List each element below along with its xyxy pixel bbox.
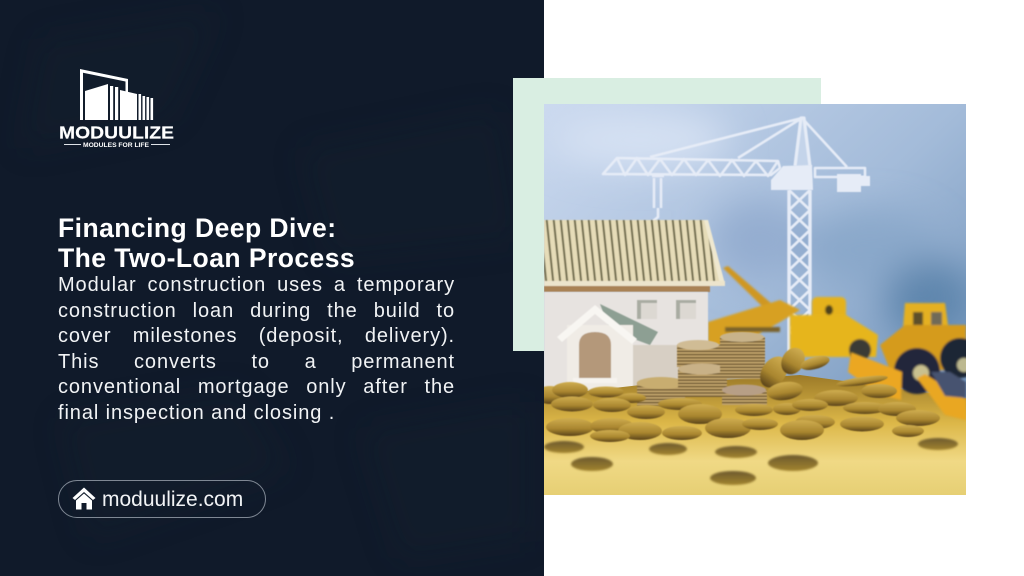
house roof	[544, 220, 725, 292]
heading	[58, 213, 355, 273]
logo tagline: MODULES FOR LIFE	[83, 142, 150, 149]
website pill	[58, 480, 266, 518]
coin pile	[536, 382, 940, 442]
crane platform and counterweight	[771, 165, 870, 192]
house porch and door	[557, 304, 679, 390]
body text: cover milestones (deposit, delivery).	[58, 325, 455, 347]
body text: Modular construction uses a temporary	[58, 274, 455, 296]
body text: This converts to a permanent	[58, 351, 455, 373]
loader toy	[848, 303, 980, 420]
upright coins by the stacks	[754, 343, 888, 402]
background yellow excavator	[708, 266, 878, 361]
heading: The Two-Loan Process	[58, 243, 355, 273]
icon: building frame and modules	[80, 69, 153, 120]
logo: Moduulize	[59, 69, 174, 149]
panel: mint accent rectangle	[513, 78, 821, 351]
table surface	[544, 375, 966, 495]
photo: miniature house, crane, coins and toy construction vehicles	[544, 104, 966, 495]
sky backdrop	[544, 104, 975, 495]
body text: construction loan during the build to	[58, 300, 455, 322]
icon: house	[72, 488, 96, 510]
panel: dark navy background	[0, 0, 544, 576]
heading: Financing Deep Dive:	[58, 213, 336, 243]
body text: final inspection and closing .	[58, 402, 335, 424]
body text: conventional mortgage only after the	[58, 376, 455, 398]
coin stacks	[637, 332, 767, 406]
logo wordmark: MODUULIZE	[59, 122, 174, 142]
website address: moduulize.com	[102, 488, 243, 511]
scattered foreground coins	[544, 438, 958, 485]
body text	[58, 274, 455, 424]
crane	[603, 118, 865, 354]
house walls and windows	[544, 292, 708, 392]
